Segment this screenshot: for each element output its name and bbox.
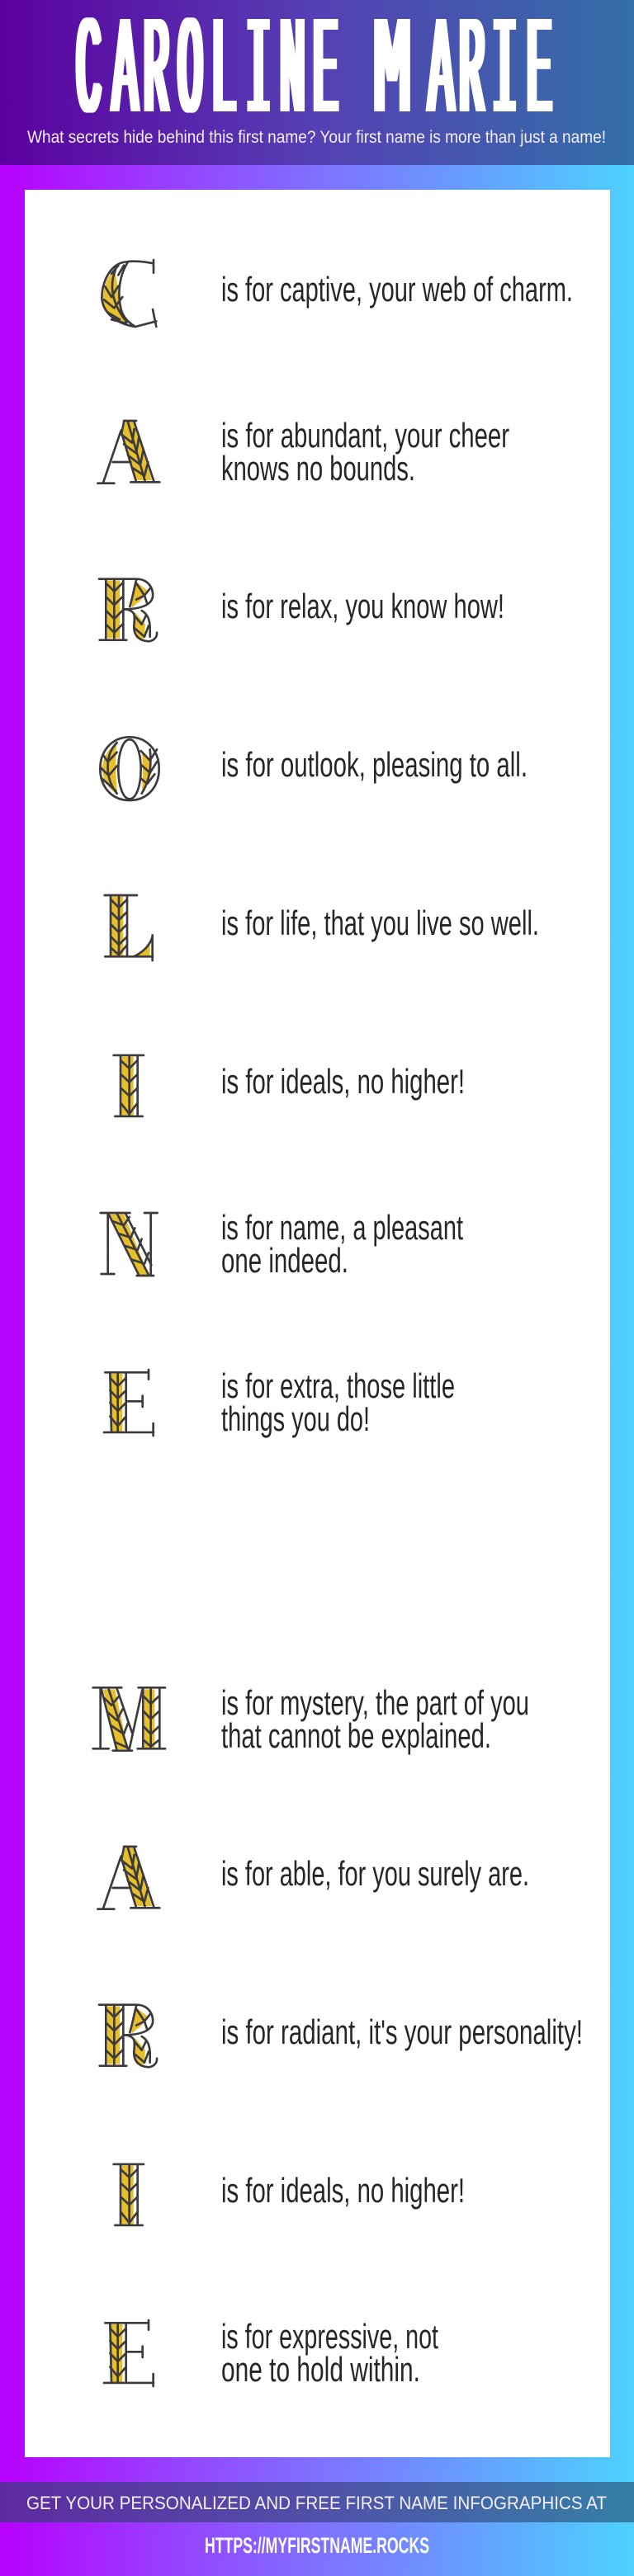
text: extra: is for extra, those little	[221, 1366, 455, 1405]
icon: letter R	[99, 2005, 157, 2067]
row: R second	[99, 2005, 583, 2067]
row: E second	[104, 2317, 438, 2389]
row: O	[100, 737, 528, 800]
icon: letter I	[114, 1055, 144, 1116]
header banner	[0, 0, 634, 165]
footer text: GET YOUR PERSONALIZED AND FREE FIRST NAME INFOGRAPHICS AT	[26, 2493, 607, 2513]
text: name line 2: one indeed.	[221, 1241, 348, 1280]
title	[76, 0, 552, 153]
row: A	[97, 416, 509, 488]
row: N	[101, 1208, 463, 1280]
icon: letter L	[105, 895, 153, 960]
footer url: HTTPS://MYFIRSTNAME.ROCKS	[205, 2533, 429, 2558]
text: expressive line 2: one to hold within.	[221, 2350, 420, 2389]
icon: letter M	[93, 1687, 165, 1751]
icon: letter N	[101, 1213, 158, 1276]
footer banner	[0, 2482, 634, 2522]
row: R	[99, 579, 504, 641]
icon: letter E	[104, 2320, 154, 2386]
row: E	[104, 1366, 455, 1438]
icon: letter O	[100, 737, 159, 800]
text: mystery line 2: that cannot be explained.	[221, 1716, 491, 1755]
icon: letter A	[97, 421, 159, 484]
icon: letter C	[102, 260, 156, 327]
row: M	[93, 1683, 529, 1755]
row: L	[105, 895, 539, 960]
icon: letter E	[104, 1370, 154, 1436]
text: name: is for name, a pleasant	[221, 1208, 463, 1247]
text: ideals: is for ideals, no higher!	[221, 1062, 465, 1101]
icon: letter R	[99, 579, 157, 641]
row: C	[102, 260, 573, 327]
row: A second	[97, 1847, 529, 1909]
icon: letter A	[97, 1847, 159, 1909]
text: abundant: is for abundant, your cheer	[221, 416, 509, 455]
icon: letter I	[114, 2164, 144, 2225]
text: ideals: is for ideals, no higher!	[221, 2171, 465, 2210]
row: I	[114, 1055, 465, 1116]
text: relax: is for relax, you know how!	[221, 587, 504, 625]
text: abundant line 2: knows no bounds.	[221, 449, 415, 488]
text: extra line 2: things you do!	[221, 1399, 370, 1438]
row: I second	[114, 2164, 465, 2225]
text: expressive: is for expressive, not	[221, 2317, 438, 2356]
